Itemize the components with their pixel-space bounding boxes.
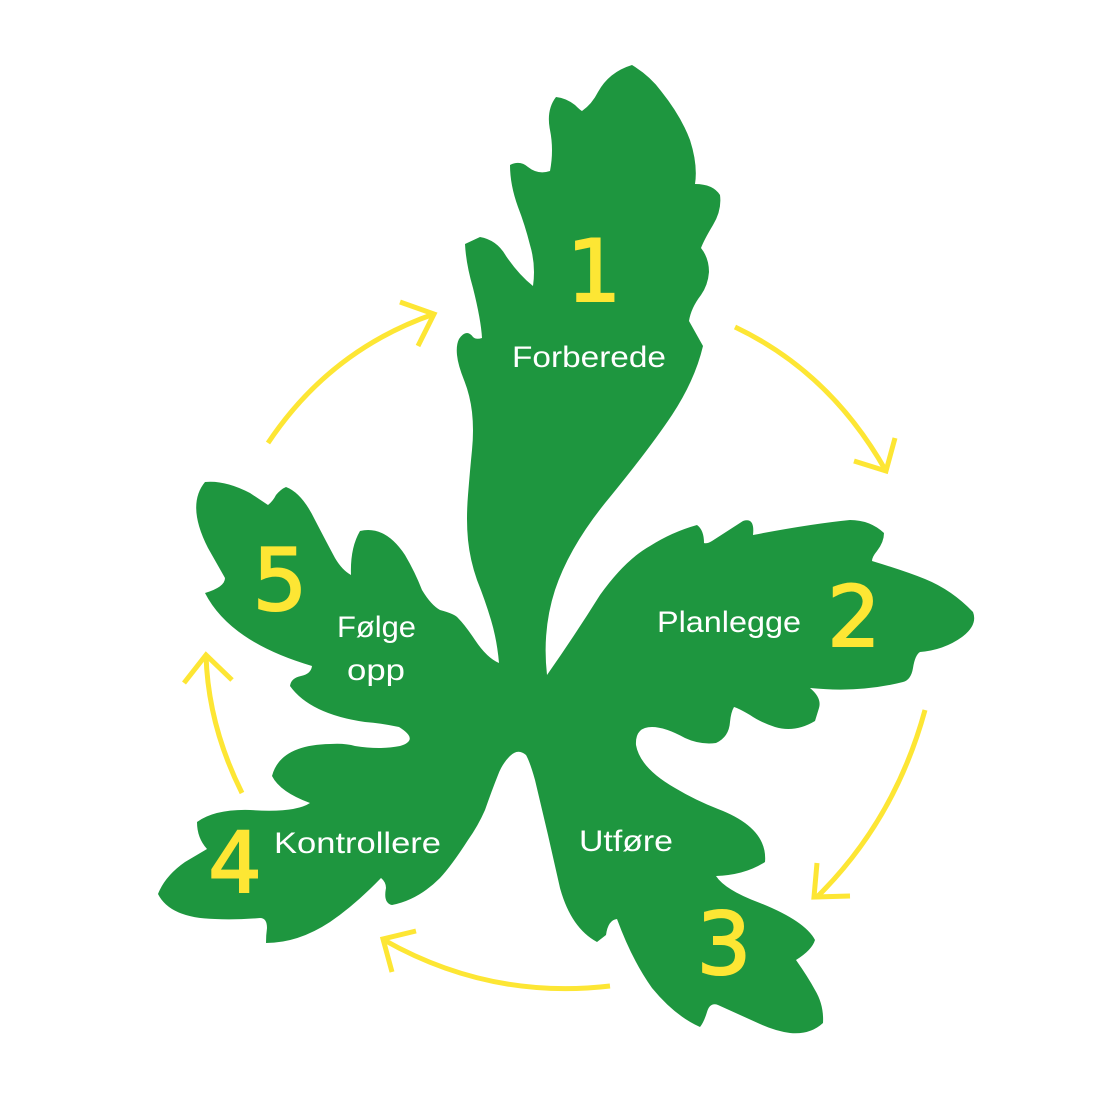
number 4: 4 [208,814,262,912]
label: Kontrollere: Kontrollere [274,827,441,860]
number 3: 3 [697,895,751,995]
label: Planlegge: Planlegge [657,606,801,639]
label: Forberede: Forberede [512,341,666,374]
green leaf shape [158,65,974,1033]
label: Utføre: Utføre [579,825,673,858]
number 2: 2 [827,568,881,666]
number 5: 5 [253,531,307,631]
arrow: step 2 to 3 [814,710,925,897]
label: Følge opp: Følge [337,611,416,644]
arrow: step 1 to 2 [735,327,895,471]
number 1: 1 [567,222,621,322]
arrow: step 5 to 1 [268,302,434,443]
arrow: step 4 to 5 [184,655,242,793]
label: Følge opp [337,611,416,687]
arrow: step 3 to 4 [383,931,610,989]
label: Følge opp: opp [347,654,405,687]
